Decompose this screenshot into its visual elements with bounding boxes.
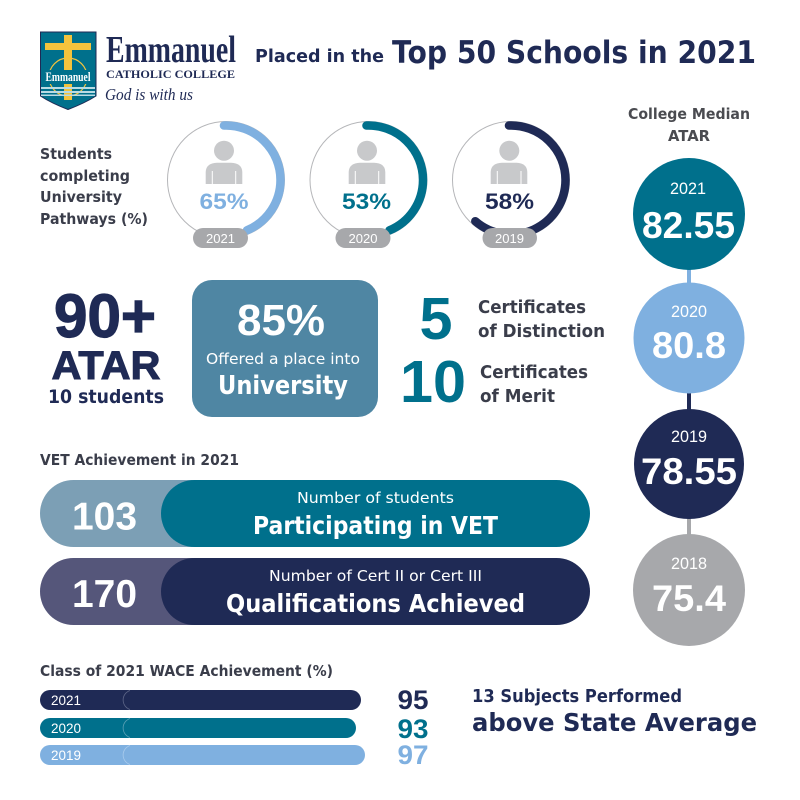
- icon: person: [491, 141, 527, 184]
- text: university pathways label: completing: [40, 167, 130, 185]
- bar: qualifications achieved: Number of Cert II or Cert III: [269, 567, 482, 585]
- logo subtitle: CATHOLIC COLLEGE: [106, 69, 235, 81]
- logo wordmark: Emmanuel: [106, 29, 236, 71]
- stat: 90+ ATAR: 10 students: [48, 386, 164, 408]
- heading: college median ATAR: College Median: [628, 105, 750, 123]
- stat: certificates of merit: of Merit: [480, 386, 555, 407]
- title: Top 50 Schools in 2021: [392, 35, 756, 71]
- ring: 2019 58%: 58%: [485, 189, 534, 214]
- ring: 2021 65%: [168, 122, 284, 248]
- bar: qualifications achieved: [40, 558, 590, 625]
- stat: certificates of distinction: 5: [420, 286, 452, 352]
- panel: 85% offered university: [192, 280, 378, 417]
- node: 2019: 78.55: [641, 450, 737, 492]
- bar: qualifications achieved: 170: [72, 573, 137, 616]
- stat: certificates of merit: 10: [400, 349, 466, 415]
- title: Placed in the: [255, 46, 384, 67]
- bar: participating in VET: Number of students: [297, 489, 454, 507]
- text: university pathways label: Students: [40, 145, 112, 163]
- node: 2021: [633, 158, 745, 270]
- stat: 90+ ATAR: [48, 282, 164, 408]
- bar: 2019 97: 97: [398, 740, 428, 770]
- panel: 85% offered university: 85%: [237, 296, 325, 345]
- bar: 2021 95: 95: [398, 685, 428, 715]
- logo motto: God is with us: [105, 85, 193, 104]
- bar: qualifications achieved: Qualifications Achieved: [226, 589, 525, 618]
- bar: 2019 97: [40, 740, 428, 770]
- bar: 2021 95: 2021: [51, 692, 81, 708]
- callout: subjects above state average: 13 Subjects Performed: [472, 686, 682, 707]
- bar: participating in VET: [40, 480, 590, 547]
- bar: 2021 95: [40, 685, 428, 715]
- stat: 90+ ATAR: 90+: [54, 282, 156, 350]
- heading: college median ATAR: [628, 105, 750, 145]
- ring: 2019 58%: 2019: [495, 231, 524, 246]
- text: university pathways label: University: [40, 188, 122, 206]
- icon: college shield: Emmanuel: [46, 70, 91, 84]
- stat: certificates of merit: Certificates: [480, 362, 588, 383]
- text: university pathways label: [40, 145, 148, 228]
- logo: [40, 29, 236, 110]
- icon: college shield: [40, 32, 96, 110]
- bar: 2019 97: 2019: [51, 747, 81, 763]
- stat: certificates of distinction: of Distinction: [478, 321, 605, 342]
- node: 2018: 2018: [671, 555, 707, 573]
- ring: 2020 53%: [310, 122, 427, 248]
- node: 2020: 80.8: [652, 324, 726, 366]
- stat: 90+ ATAR: ATAR: [52, 344, 161, 388]
- callout: subjects above state average: [472, 686, 757, 737]
- node: 2019: 2019: [671, 428, 707, 446]
- node: 2019: [634, 409, 744, 519]
- node: 2018: [633, 534, 745, 646]
- node: 2021: 2021: [670, 180, 706, 198]
- stat: certificates of distinction: Certificates: [478, 297, 586, 318]
- bar: participating in VET: 103: [72, 496, 137, 538]
- node: 2020: 2020: [671, 303, 707, 321]
- node: 2021: 82.55: [642, 204, 735, 246]
- bar: participating in VET: Participating in VET: [253, 511, 498, 540]
- bar: 2020 93: 93: [398, 714, 428, 744]
- title: [255, 35, 756, 71]
- ring: 2019 58%: [452, 122, 570, 248]
- icon: person: [349, 141, 385, 184]
- panel: 85% offered university: University: [218, 371, 348, 401]
- node: 2018: 75.4: [652, 577, 726, 619]
- ring: 2020 53%: 53%: [342, 189, 391, 214]
- chart: median ATAR timeline: [633, 158, 745, 646]
- chart: WACE bars: [40, 685, 428, 770]
- panel: 85% offered university: Offered a place into: [206, 350, 360, 368]
- ring: 2020 53%: 2020: [348, 231, 378, 246]
- stat: certificates of distinction: [420, 286, 605, 352]
- node: 2020: [634, 282, 744, 394]
- stat: certificates of merit: [400, 349, 588, 415]
- text: university pathways label: Pathways (%): [40, 210, 148, 228]
- heading: VET achievement: VET Achievement in 2021: [40, 451, 239, 469]
- bar: 2020 93: 2020: [51, 720, 81, 736]
- heading: WACE achievement: Class of 2021 WACE Achievement (%): [40, 662, 333, 680]
- bar: 2020 93: [40, 714, 428, 744]
- icon: person: [206, 141, 242, 184]
- ring: 2021 65%: 2021: [206, 231, 235, 246]
- heading: college median ATAR: ATAR: [668, 127, 710, 145]
- callout: subjects above state average: above State Average: [472, 708, 757, 737]
- ring: 2021 65%: 65%: [200, 189, 248, 214]
